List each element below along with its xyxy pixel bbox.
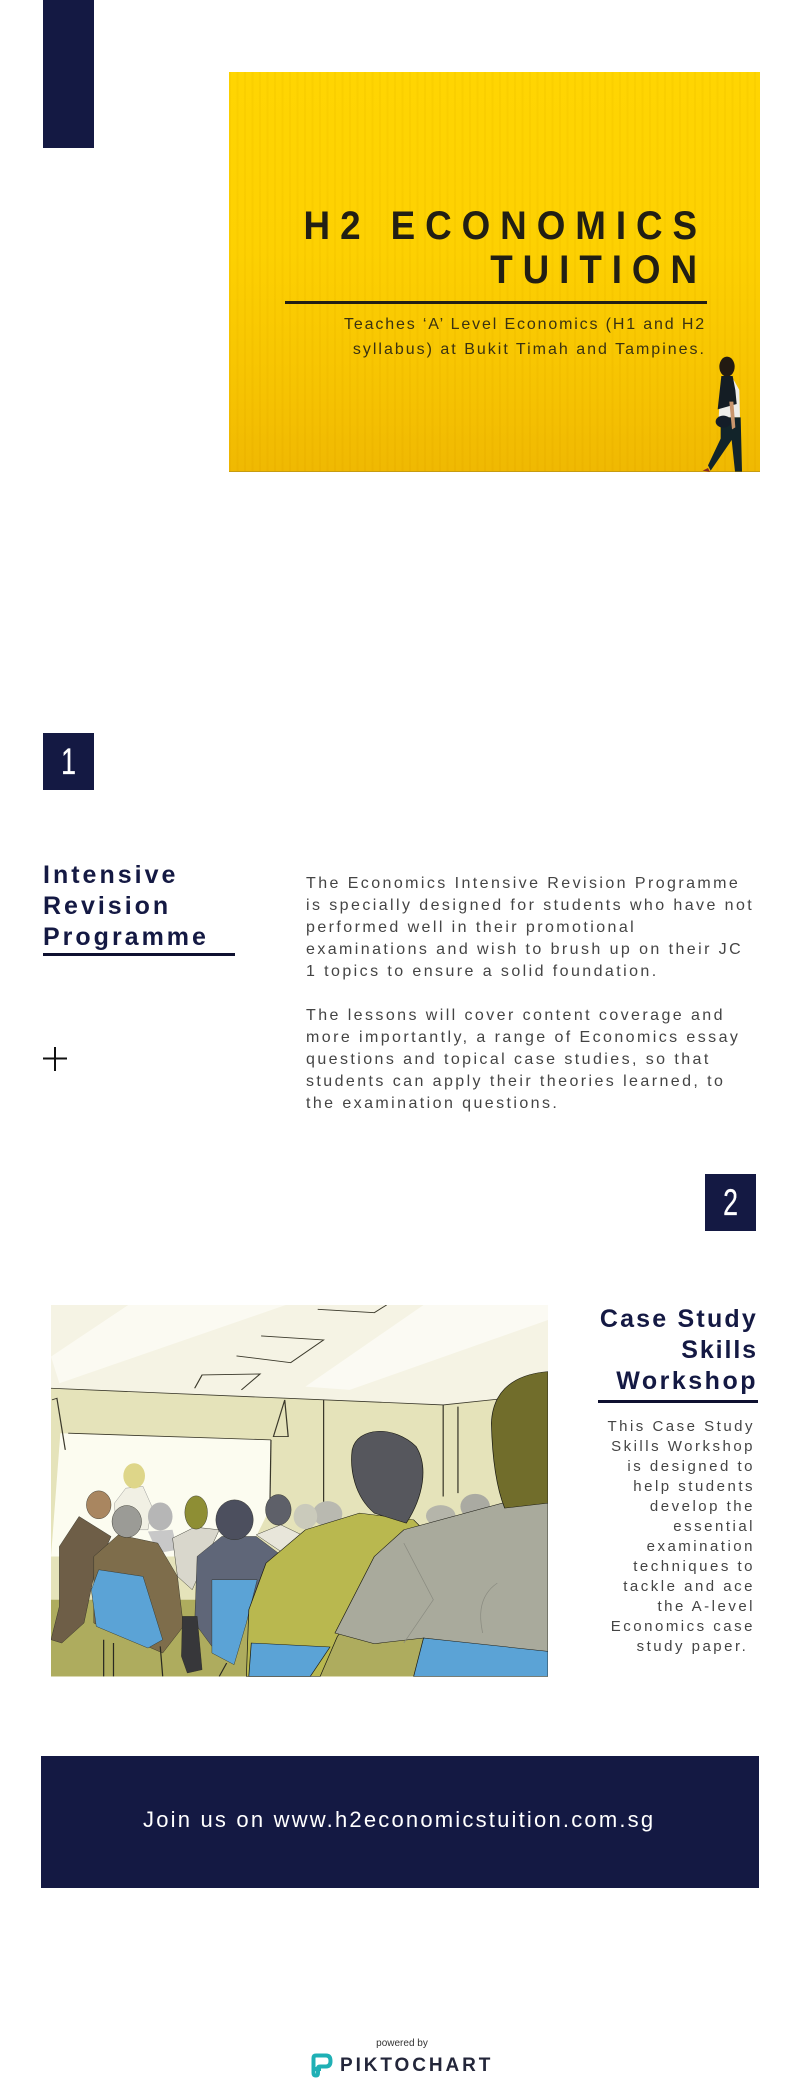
body text: case study workshop: This Case Study bbox=[607, 1418, 755, 1435]
body text: case study workshop: Economics case bbox=[611, 1618, 755, 1635]
body text: case study workshop bbox=[607, 1418, 755, 1655]
Piktochart wordmark: PIKTOCHART bbox=[340, 2055, 493, 2076]
body text: case study workshop: develop the bbox=[650, 1498, 755, 1515]
body text: case study workshop: tackle and ace bbox=[623, 1578, 755, 1595]
subtitle bbox=[344, 316, 706, 358]
body text: intensive programme: examinations and wish to brush up on their JC bbox=[306, 940, 743, 958]
number box 2 bbox=[705, 1174, 756, 1231]
heading: Case Study Skills Workshop: Workshop bbox=[616, 1367, 758, 1395]
body text: intensive programme: questions and topical case studies, so that bbox=[306, 1050, 711, 1068]
body text: case study workshop: Skills Workshop bbox=[611, 1438, 755, 1455]
panel: yellow hero bbox=[229, 72, 760, 472]
icon: walking woman bbox=[702, 356, 742, 472]
heading: Intensive Revision Programme bbox=[43, 861, 209, 951]
body text: case study workshop: techniques to bbox=[633, 1558, 755, 1575]
title: TUITION bbox=[490, 248, 707, 292]
body text: intensive programme: more importantly, a range of Economics essay bbox=[306, 1028, 740, 1046]
yellow-green student bbox=[246, 1431, 424, 1676]
body text: case study workshop: the A-level bbox=[657, 1598, 755, 1615]
body text: intensive programme: students can apply their theories learned, to bbox=[306, 1072, 725, 1090]
heading: Intensive Revision Programme: Intensive bbox=[43, 861, 178, 889]
heading: Case Study Skills Workshop bbox=[600, 1305, 758, 1395]
title bbox=[304, 204, 707, 292]
subtitle: Teaches ‘A’ Level Economics (H1 and H2 bbox=[344, 316, 706, 333]
body text: intensive programme: is specially designed for students who have not bbox=[306, 896, 754, 914]
heading: Case Study Skills Workshop: Case Study bbox=[600, 1305, 758, 1333]
body text: intensive programme: performed well in their promotional bbox=[306, 918, 636, 936]
icon: plus bbox=[43, 1047, 67, 1071]
banner text: Join us on www.h2economicstuition.com.sg bbox=[143, 1807, 655, 1832]
top navy bar bbox=[43, 0, 94, 148]
grey front student bbox=[335, 1372, 548, 1676]
title: H2 ECONOMICS bbox=[304, 204, 707, 248]
powered by text: powered by bbox=[376, 2038, 428, 2049]
heading: Intensive Revision Programme: Programme bbox=[43, 923, 209, 951]
seated audience left bbox=[51, 1491, 301, 1676]
body text: case study workshop: essential bbox=[673, 1518, 755, 1535]
presenter and far rows bbox=[114, 1463, 490, 1553]
footer: powered by Piktochart bbox=[312, 2038, 493, 2078]
image: classroom illustration bbox=[51, 1305, 548, 1677]
heading: Case Study Skills Workshop: Skills bbox=[681, 1336, 758, 1364]
body text: intensive programme: The lessons will cover content coverage and bbox=[306, 1006, 725, 1024]
title rule bbox=[285, 301, 707, 304]
body text: intensive programme bbox=[306, 874, 754, 1112]
body text: intensive programme: The Economics Intensive Revision Programme bbox=[306, 874, 740, 892]
number box 1: 1 bbox=[61, 741, 76, 782]
body text: intensive programme: 1 topics to ensure a solid foundation. bbox=[306, 962, 659, 980]
icon: Piktochart logo bbox=[312, 2054, 332, 2078]
body text: case study workshop: help students bbox=[633, 1478, 755, 1495]
number box 2: 2 bbox=[723, 1182, 738, 1223]
heading: Intensive Revision Programme: Revision bbox=[43, 892, 171, 920]
body text: case study workshop: is designed to bbox=[627, 1458, 755, 1475]
body text: case study workshop: examination bbox=[647, 1538, 755, 1555]
number box 1 bbox=[43, 733, 94, 790]
heading rule bbox=[598, 1400, 758, 1403]
subtitle: syllabus) at Bukit Timah and Tampines. bbox=[353, 341, 706, 358]
heading rule bbox=[43, 953, 235, 956]
body text: case study workshop: study paper. bbox=[637, 1638, 748, 1655]
panel: call to action banner bbox=[41, 1756, 759, 1888]
body text: intensive programme: the examination questions. bbox=[306, 1094, 559, 1112]
